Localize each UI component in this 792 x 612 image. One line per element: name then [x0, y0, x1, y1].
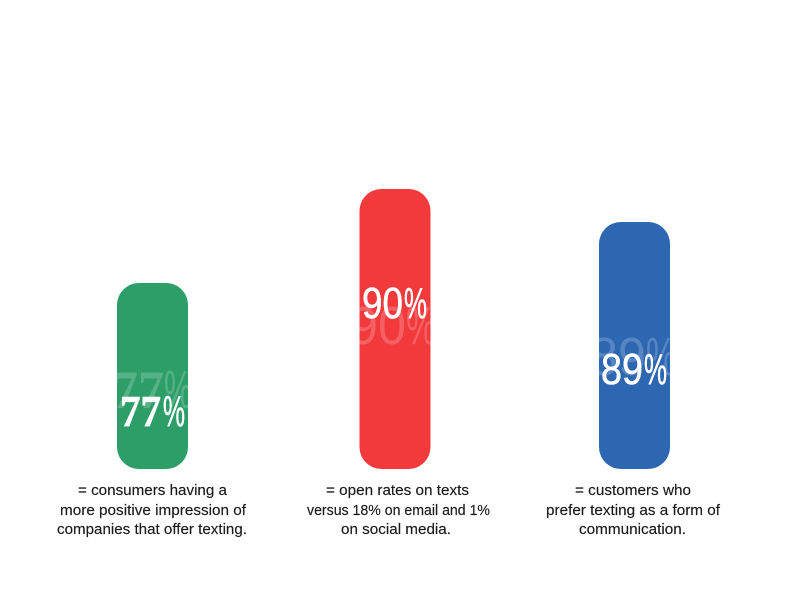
- caption: customers: = customers who: [575, 483, 691, 499]
- ghost value 90%: %: [406, 296, 436, 356]
- ghost value 77%: %: [164, 360, 192, 420]
- value 90%: 90: [362, 279, 403, 328]
- value 89%: 89: [601, 345, 643, 394]
- value 90%: %: [404, 279, 427, 328]
- ghost value 89%: 89: [590, 327, 646, 387]
- caption: consumers: [57, 483, 247, 538]
- caption: customers: prefer texting as a form of: [546, 503, 721, 519]
- panel: blue 89% column: [546, 222, 721, 538]
- caption: open rates: on social media.: [341, 522, 451, 538]
- ghost value 90%: 90: [350, 296, 406, 356]
- caption: customers: [546, 483, 721, 538]
- caption: open rates: versus 18% on email and 1%: [307, 503, 490, 519]
- caption: open rates: [307, 483, 490, 538]
- caption: consumers: = consumers having a: [78, 483, 228, 499]
- value 77%: 77: [120, 387, 161, 436]
- caption: consumers: more positive impression of: [60, 503, 247, 519]
- ghost value 89%: %: [646, 327, 676, 387]
- value 89%: %: [644, 345, 667, 394]
- panel: green 77% column: [57, 283, 247, 538]
- green bar: [117, 283, 188, 469]
- panel: red 90% column: [307, 189, 490, 538]
- infographic canvas: [58, 189, 720, 538]
- ghost value 77%: 77: [112, 360, 164, 420]
- caption: consumers: companies that offer texting.: [57, 522, 247, 538]
- red bar: [360, 189, 430, 469]
- caption: open rates: = open rates on texts: [326, 483, 469, 499]
- caption: customers: communication.: [579, 522, 686, 538]
- blue bar: [599, 222, 670, 469]
- value 77%: %: [163, 387, 185, 436]
